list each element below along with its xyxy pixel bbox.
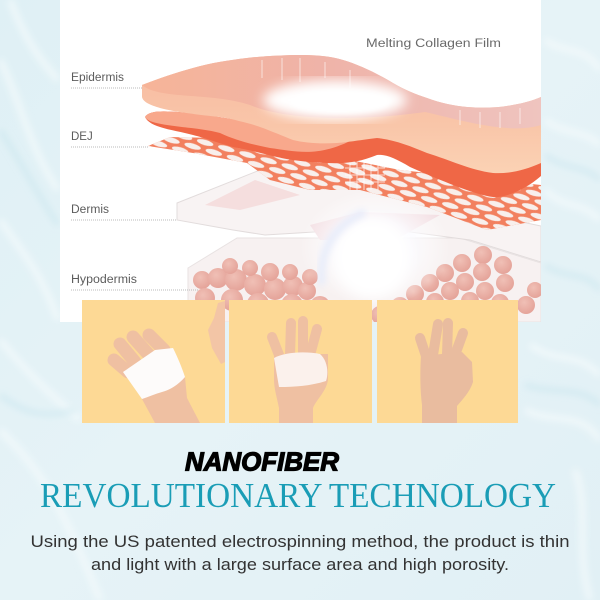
label: dermis: Dermis bbox=[71, 204, 109, 216]
label: hypodermis bbox=[71, 274, 198, 290]
hypodermis: glass tray with fat spheres bbox=[188, 238, 543, 324]
body text: Using the US patented electrospinning method, the product is thin bbox=[30, 532, 570, 551]
DEJ: orange mesh bbox=[148, 137, 541, 230]
epidermis: upper skin layer bbox=[142, 55, 541, 173]
photo: hand with dry film bbox=[82, 300, 225, 423]
body text: and light with a large surface area and high porosity. bbox=[91, 555, 509, 574]
label: epidermis: Epidermis bbox=[71, 72, 124, 84]
body text bbox=[30, 532, 570, 574]
heading: revolutionary technology: REVOLUTIONARY TECHNOLOGY bbox=[40, 476, 556, 515]
label: hypodermis: Hypodermis bbox=[71, 274, 137, 286]
panel: skin layer diagram bbox=[60, 0, 543, 324]
label: epidermis bbox=[71, 72, 142, 88]
icon: spray hand at edge bbox=[208, 301, 225, 364]
photo: hand with melting film bbox=[229, 300, 372, 423]
label: DEJ: DEJ bbox=[71, 131, 93, 143]
label: melting collagen film: Melting Collagen Film bbox=[366, 38, 501, 50]
glow: central energy burst bbox=[310, 212, 442, 300]
label: DEJ bbox=[71, 131, 148, 147]
DEJ: lower skin layer bbox=[145, 111, 541, 197]
heading: nanofiber: NANOFIBER bbox=[185, 446, 339, 476]
label: dermis bbox=[71, 204, 177, 220]
photo: hand with absorbed film bbox=[377, 300, 518, 423]
dermis: translucent collagen slab bbox=[177, 170, 541, 262]
